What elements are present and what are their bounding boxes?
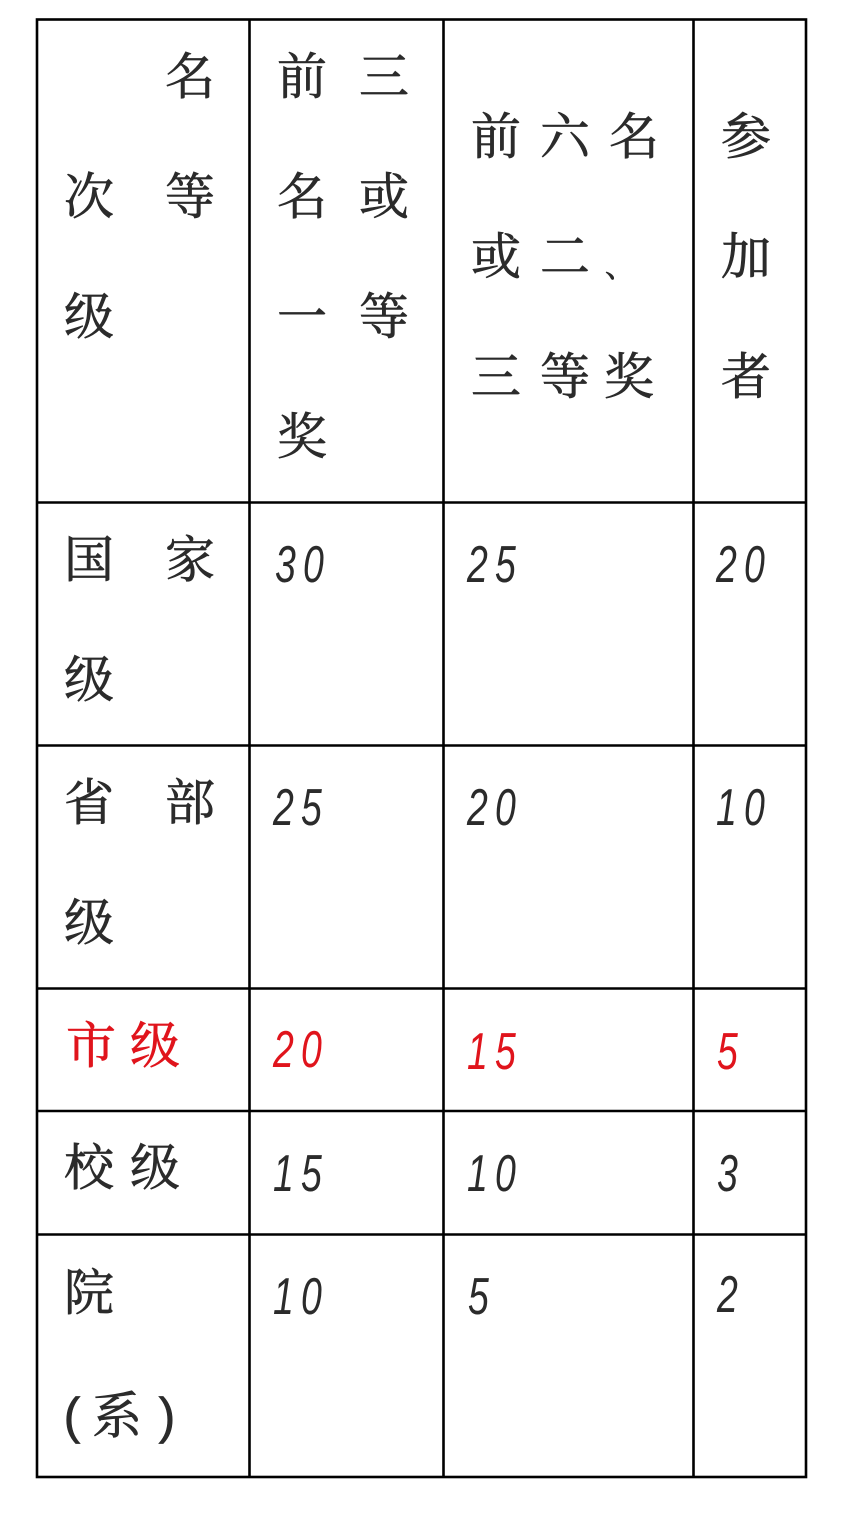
row: national level: 20 xyxy=(715,535,772,593)
header: top three or first prize: 一 xyxy=(277,289,327,345)
row: school level: 3 xyxy=(717,1144,745,1202)
header: top six or second and third prize: 六 xyxy=(540,109,591,165)
header: top six or second and third prize: 名 xyxy=(609,109,659,165)
row: college or department level: 院 xyxy=(64,1265,114,1321)
row: provincial level: 20 xyxy=(466,778,523,836)
row: national level: 30 xyxy=(275,535,331,593)
header: participants xyxy=(721,109,771,405)
row: school level: 10 xyxy=(467,1144,523,1202)
row: school level: 级 xyxy=(130,1140,180,1196)
row: city level (highlighted): 级 xyxy=(130,1018,180,1074)
row: college or department level: 5 xyxy=(468,1267,496,1325)
row: national level: 国 xyxy=(64,532,114,588)
row: provincial level xyxy=(64,775,772,951)
row: college or department level: 10 xyxy=(273,1267,329,1325)
row: college or department level xyxy=(64,1265,745,1444)
row: school level: 校 xyxy=(64,1140,116,1196)
row: provincial level: 10 xyxy=(716,778,772,836)
row: city level (highlighted) xyxy=(66,1018,745,1080)
row: national level: 25 xyxy=(466,535,523,593)
row: school level: 15 xyxy=(273,1144,329,1202)
header: top three or first prize: 奖 xyxy=(277,409,327,465)
row: provincial level: 级 xyxy=(64,895,114,951)
row: national level xyxy=(64,532,772,708)
header: top six or second and third prize xyxy=(471,109,659,405)
row: college or department level: ( xyxy=(64,1388,81,1444)
header: rank and level: 等 xyxy=(165,169,215,225)
header: top three or first prize xyxy=(277,49,409,465)
header: rank and level xyxy=(64,49,215,345)
header: participants: 参 xyxy=(721,109,771,165)
header: rank and level: 级 xyxy=(64,289,114,345)
header: rank and level: 次 xyxy=(64,169,114,225)
row: college or department level: 系 xyxy=(92,1388,142,1444)
header: top six or second and third prize: 等 xyxy=(540,349,590,405)
row: provincial level: 25 xyxy=(272,778,329,836)
header: top six or second and third prize: 三 xyxy=(471,349,521,405)
header: top six or second and third prize: 奖 xyxy=(604,349,654,405)
header: rank and level: 名 xyxy=(165,49,215,105)
header: top six or second and third prize: 前 xyxy=(471,109,521,165)
row: city level (highlighted): 5 xyxy=(717,1022,745,1080)
row: city level (highlighted): 20 xyxy=(272,1020,329,1078)
header: top three or first prize: 等 xyxy=(359,289,409,345)
header: top three or first prize: 三 xyxy=(359,49,409,105)
header: top three or first prize: 前 xyxy=(277,49,327,105)
header: top three or first prize: 或 xyxy=(359,169,409,225)
header: top six or second and third prize: 二 xyxy=(540,229,590,285)
row: national level: 家 xyxy=(165,532,215,588)
row: city level (highlighted): 15 xyxy=(467,1022,523,1080)
row: provincial level: 部 xyxy=(165,775,215,831)
header: top three or first prize: 名 xyxy=(277,169,327,225)
header: participants: 加 xyxy=(721,229,771,285)
row: city level (highlighted): 市 xyxy=(66,1018,116,1074)
header: participants: 者 xyxy=(721,349,771,405)
row: national level: 级 xyxy=(64,652,114,708)
header: top six or second and third prize: 或 xyxy=(471,229,521,285)
row: college or department level: ) xyxy=(159,1388,175,1444)
row: provincial level: 省 xyxy=(64,775,114,831)
row: school level xyxy=(64,1140,745,1202)
row: college or department level: 2 xyxy=(716,1265,745,1323)
header: top six or second and third prize: 、 xyxy=(605,251,635,284)
